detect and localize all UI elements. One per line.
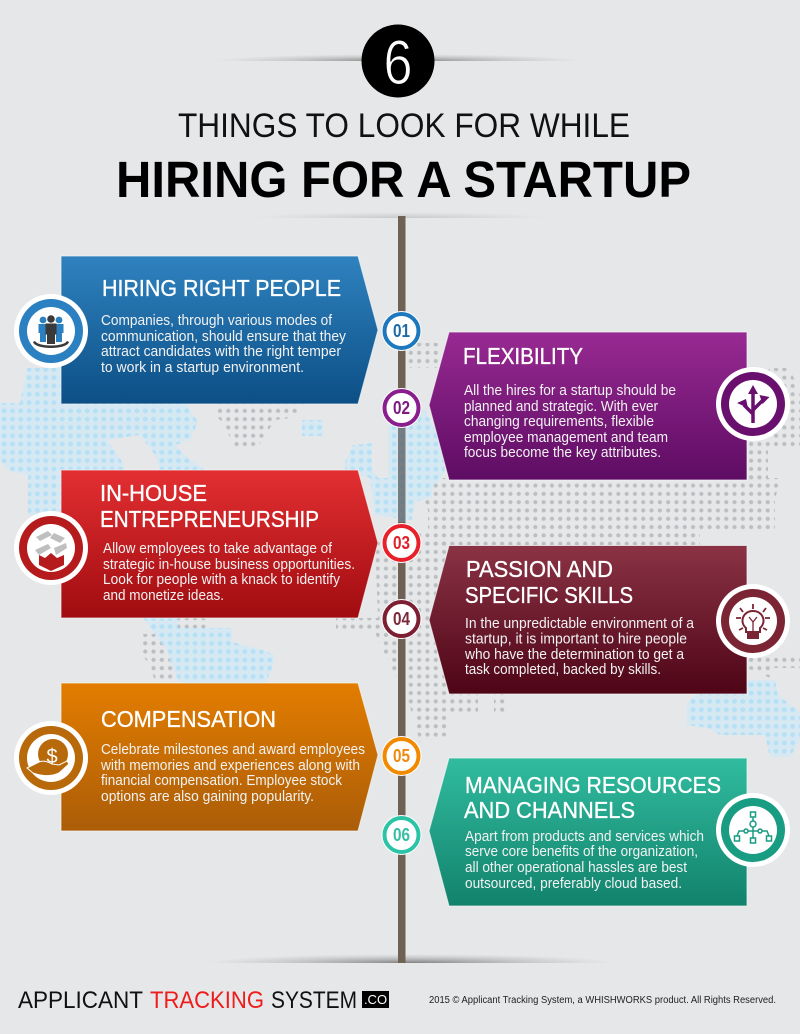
text: flexibility: focus become the key attributes. (464, 445, 661, 461)
text: passion and specific skills (464, 616, 695, 678)
text: passion and specific skills: who have the determination to get a (464, 647, 685, 663)
footer logo: .CO (364, 992, 387, 1007)
step badge 06: 06 (393, 825, 410, 845)
shadow under badge (238, 55, 559, 61)
icon: money in hand (14, 721, 88, 795)
step badge 06 (382, 815, 422, 855)
world map dots (0, 343, 800, 757)
text: hiring right people: to work in a startup environment. (101, 360, 304, 376)
text: managing resources and channels (465, 829, 704, 892)
icon: people (14, 294, 88, 368)
panel: flexibility (429, 332, 790, 480)
heading: managing resources and channels: AND CHANNELS (464, 797, 635, 823)
text: compensation: with memories and experiences along with (100, 758, 360, 774)
footer logo (18, 987, 389, 1014)
shadow at timeline base (232, 955, 588, 963)
heading: in-house entrepreneurship (100, 480, 319, 532)
panel: managing resources and channels (429, 758, 790, 906)
icon: money in hand: $ (46, 746, 58, 768)
text: passion and specific skills: In the unpredictable environment of a (465, 616, 695, 632)
text: compensation: options are also gaining popularity. (101, 789, 314, 805)
text: in-house entrepreneurship: strategic in-house business opportunities. (103, 557, 355, 573)
text: managing resources and channels: all other operational hassles are best (465, 860, 687, 876)
text: hiring right people: Companies, through various modes of (101, 313, 333, 329)
step badge 01: 01 (393, 321, 410, 341)
heading badge: 6: 6 (384, 28, 412, 98)
icon: open box (14, 511, 88, 585)
icon: light bulb (716, 584, 790, 658)
step badge 05 (382, 736, 422, 776)
heading: passion and specific skills: PASSION AND (466, 556, 613, 582)
step badge 03 (382, 523, 422, 563)
icon: network (716, 793, 790, 867)
text: flexibility: All the hires for a startup should be (464, 383, 676, 399)
step badge 04 (382, 599, 422, 639)
text: passion and specific skills: startup, it is important to hire people (465, 632, 687, 648)
footer logo: TRACKING (150, 987, 264, 1014)
text: in-house entrepreneurship: Allow employees to take advantage of (103, 541, 333, 557)
heading: compensation: COMPENSATION (101, 706, 276, 732)
text: in-house entrepreneurship: Look for people with a knack to identify (103, 572, 341, 588)
panel: in-house entrepreneurship (14, 470, 378, 618)
text: in-house entrepreneurship: and monetize ideas. (103, 588, 224, 604)
text: managing resources and channels: serve core benefits of the organization, (465, 844, 698, 860)
text: flexibility: employee management and team (464, 430, 668, 446)
heading: managing resources and channels (464, 772, 721, 823)
timeline line (398, 216, 406, 963)
heading: in-house entrepreneurship: ENTREPRENEURSHIP (100, 506, 319, 532)
heading badge: 6 (362, 24, 434, 98)
panel: compensation (14, 683, 378, 831)
text: compensation (100, 742, 365, 805)
step badge 02 (382, 388, 422, 428)
panel: passion and specific skills (429, 546, 790, 694)
step badge 04: 04 (393, 609, 410, 629)
step badge 05: 05 (393, 746, 410, 766)
heading: flexibility: FLEXIBILITY (463, 343, 583, 369)
panel: hiring right people (14, 256, 378, 404)
text: managing resources and channels: outsourced, preferably cloud based. (465, 876, 682, 892)
text: passion and specific skills: task completed, backed by skills. (465, 662, 661, 678)
text: hiring right people (101, 313, 347, 376)
shadow under title (296, 214, 504, 218)
text: flexibility: planned and strategic. With ever (464, 399, 658, 415)
heading: in-house entrepreneurship: IN-HOUSE (100, 480, 207, 506)
step badge 02: 02 (393, 398, 410, 418)
footer logo: SYSTEM (271, 987, 357, 1014)
footer copyright: 2015 © Applicant Tracking System, a WHISHWORKS product. All Rights Reserved. (429, 995, 776, 1006)
text: hiring right people: communication, should ensure that they (101, 329, 347, 345)
text: flexibility: changing requirements, flexible (464, 414, 654, 430)
text: hiring right people: attract candidates with the right temper (101, 344, 341, 360)
heading: hiring right people: HIRING RIGHT PEOPLE (102, 275, 341, 301)
footer logo: APPLICANT (18, 987, 143, 1014)
title line 1: THINGS TO LOOK FOR WHILE (178, 107, 630, 145)
title line 2: HIRING FOR A STARTUP (116, 151, 691, 208)
text: in-house entrepreneurship (103, 541, 355, 604)
step badge 01 (382, 311, 422, 351)
icon: diverging arrows (716, 367, 790, 441)
text: managing resources and channels: Apart from products and services which (465, 829, 704, 845)
text: flexibility (464, 383, 676, 461)
step badge 03: 03 (393, 533, 410, 553)
heading: passion and specific skills (465, 556, 633, 608)
text: compensation: financial compensation. Employee stock (101, 773, 343, 789)
text: compensation: Celebrate milestones and award employees (101, 742, 365, 758)
heading: passion and specific skills: SPECIFIC SKILLS (465, 582, 633, 608)
heading: managing resources and channels: MANAGING RESOURCES (465, 772, 721, 798)
